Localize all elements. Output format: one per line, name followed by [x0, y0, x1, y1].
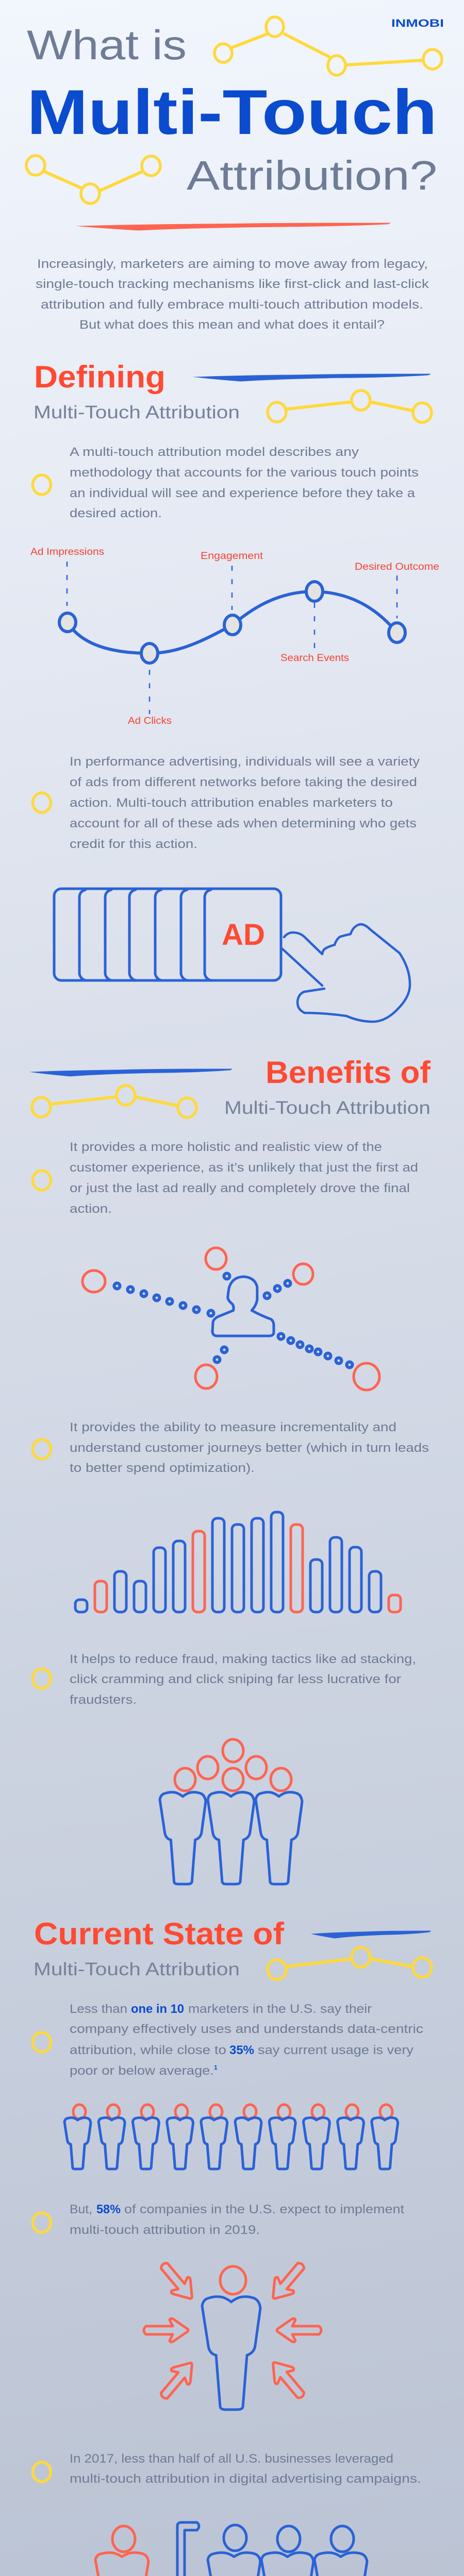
- bullet: [33, 2213, 51, 2232]
- paragraph: 58 percent: multi-touch attribution in 2019.: [70, 2223, 260, 2237]
- paragraph: holistic view: customer experience, as it’s unlikely that just the first ad: [70, 1161, 418, 1175]
- paragraph: 2017 businesses: multi-touch attribution in digital advertising campaigns.: [70, 2472, 421, 2486]
- brush stroke: red divider: [75, 223, 391, 230]
- paragraph: incrementality: understand customer journeys better (which in turn leads: [70, 1441, 429, 1455]
- paragraph: one in 10: 1: [214, 2064, 218, 2071]
- bullet: [33, 475, 51, 495]
- paragraph: fraud: [70, 1652, 416, 1707]
- brush stroke: blue: [193, 374, 431, 381]
- subheading: Multi-Touch Attribution: [34, 1959, 240, 1979]
- icon: yellow trio: [32, 1086, 196, 1117]
- paragraph: one in 10: marketers in the U.S. say their: [188, 2002, 372, 2016]
- paragraph: holistic view: action.: [70, 1202, 112, 1216]
- paragraph: one in 10: one in 10: [131, 2002, 184, 2016]
- icon: person connected to touch points: [82, 1248, 379, 1390]
- intro text: Increasingly, marketers are aiming to move away from legacy,: [37, 257, 428, 271]
- title: Attribution?: [187, 152, 437, 198]
- intro text: [36, 257, 429, 332]
- paragraph: one in 10: [70, 2002, 423, 2078]
- paragraph: fraud: It helps to reduce fraud, making tactics like ad stacking,: [70, 1652, 416, 1666]
- icon: yellow touchpoint path top: [214, 17, 442, 75]
- paragraph: definition: A multi-touch attribution model describes any: [70, 445, 359, 459]
- paragraph: incrementality: [70, 1420, 429, 1475]
- paragraph: one in 10: poor or below average.: [70, 2064, 214, 2078]
- paragraph: 58 percent: of companies in the U.S. expect to implement: [124, 2202, 404, 2216]
- paragraph: definition: an individual will see and experience before they take a: [70, 486, 416, 500]
- icon: ad cards and pointing hand: AD: [222, 918, 265, 952]
- icon: yellow touchpoint path lower: [26, 156, 160, 204]
- paragraph: 58 percent: 58%: [96, 2202, 121, 2216]
- paragraph: holistic view: [70, 1140, 418, 1216]
- chart: customer journey timeline: Ad Clicks: [128, 716, 172, 726]
- icon: person surrounded by arrows: [144, 2257, 321, 2410]
- bullet: [33, 1171, 51, 1190]
- paragraph: performance advertising: action. Multi-touch attribution enables marketers to: [70, 796, 393, 810]
- paragraph: performance advertising: [70, 755, 420, 851]
- subheading: Multi-Touch Attribution: [34, 402, 240, 422]
- icon: row of ten people: [64, 2105, 398, 2169]
- paragraph: 2017 businesses: In 2017, less than half of all U.S. businesses leveraged: [70, 2452, 393, 2466]
- paragraph: one in 10: company effectively uses and understands data-centric: [70, 2022, 423, 2036]
- paragraph: fraud: click cramming and click sniping far less lucrative for: [70, 1672, 401, 1686]
- bullet: [33, 1669, 51, 1688]
- brush stroke: blue: [311, 1930, 431, 1938]
- icon: yellow trio: [268, 1947, 432, 1979]
- chart: customer journey timeline: Ad Impressions: [30, 547, 104, 557]
- intro text: But what does this mean and what does it entail?: [79, 318, 385, 332]
- intro text: attribution and fully embrace multi-touch attribution models.: [41, 298, 423, 312]
- paragraph: incrementality: It provides the ability to measure incrementality and: [70, 1420, 396, 1434]
- bullet: [33, 1439, 51, 1459]
- bullet: [33, 793, 51, 812]
- bullet: [33, 2032, 51, 2052]
- paragraph: 2017 businesses: [70, 2452, 421, 2486]
- chart: customer journey timeline: [30, 547, 439, 726]
- chart: customer journey timeline: Desired Outcome: [355, 562, 439, 572]
- icon: group of people: [160, 1739, 302, 1884]
- paragraph: performance advertising: of ads from different networks before taking the desired: [70, 775, 417, 789]
- paragraph: definition: desired action.: [70, 506, 162, 520]
- bullet: [33, 2462, 51, 2482]
- intro text: single-touch tracking mechanisms like first-click and last-click: [36, 277, 429, 291]
- chart: customer journey timeline: Engagement: [201, 551, 263, 562]
- title: Multi-Touch: [27, 77, 437, 148]
- title: [27, 22, 437, 198]
- paragraph: fraud: fraudsters.: [70, 1693, 137, 1707]
- heading: Defining: Defining: [34, 360, 165, 394]
- paragraph: 58 percent: [70, 2202, 404, 2237]
- paragraph: holistic view: It provides a more holistic and realistic view of the: [70, 1140, 382, 1154]
- chart: customer journey timeline: Search Events: [280, 653, 349, 664]
- logo: InMobi header: INMOBI: [391, 18, 444, 29]
- heading: Benefits of: Benefits of: [266, 1055, 431, 1090]
- paragraph: performance advertising: credit for this action.: [70, 837, 197, 851]
- title: What is: [27, 22, 187, 69]
- chart: bars: [75, 1512, 401, 1612]
- icon: yellow trio: [268, 391, 432, 422]
- paragraph: 58 percent: But,: [70, 2202, 92, 2216]
- paragraph: incrementality: to better spend optimization).: [70, 1461, 255, 1475]
- brush stroke: blue: [29, 1069, 233, 1076]
- icon: ad cards and pointing hand: [54, 889, 410, 1022]
- paragraph: performance advertising: In performance advertising, individuals will see a variety: [70, 755, 420, 769]
- paragraph: definition: [70, 445, 419, 520]
- paragraph: holistic view: or just the last ad really and completely drove the final: [70, 1181, 410, 1195]
- paragraph: one in 10: attribution, while close to: [70, 2043, 226, 2057]
- paragraph: one in 10: 35%: [229, 2043, 254, 2057]
- paragraph: one in 10: say current usage is very: [258, 2043, 413, 2057]
- paragraph: one in 10: Less than: [70, 2002, 127, 2016]
- heading: Current State of: Current State of: [34, 1917, 285, 1951]
- subheading: Multi-Touch Attribution: [224, 1098, 430, 1118]
- paragraph: definition: methodology that accounts for the various touch points: [70, 466, 419, 480]
- paragraph: performance advertising: account for all of these ads when determining who gets: [70, 817, 417, 831]
- icon: one person versus three: [95, 2522, 367, 2576]
